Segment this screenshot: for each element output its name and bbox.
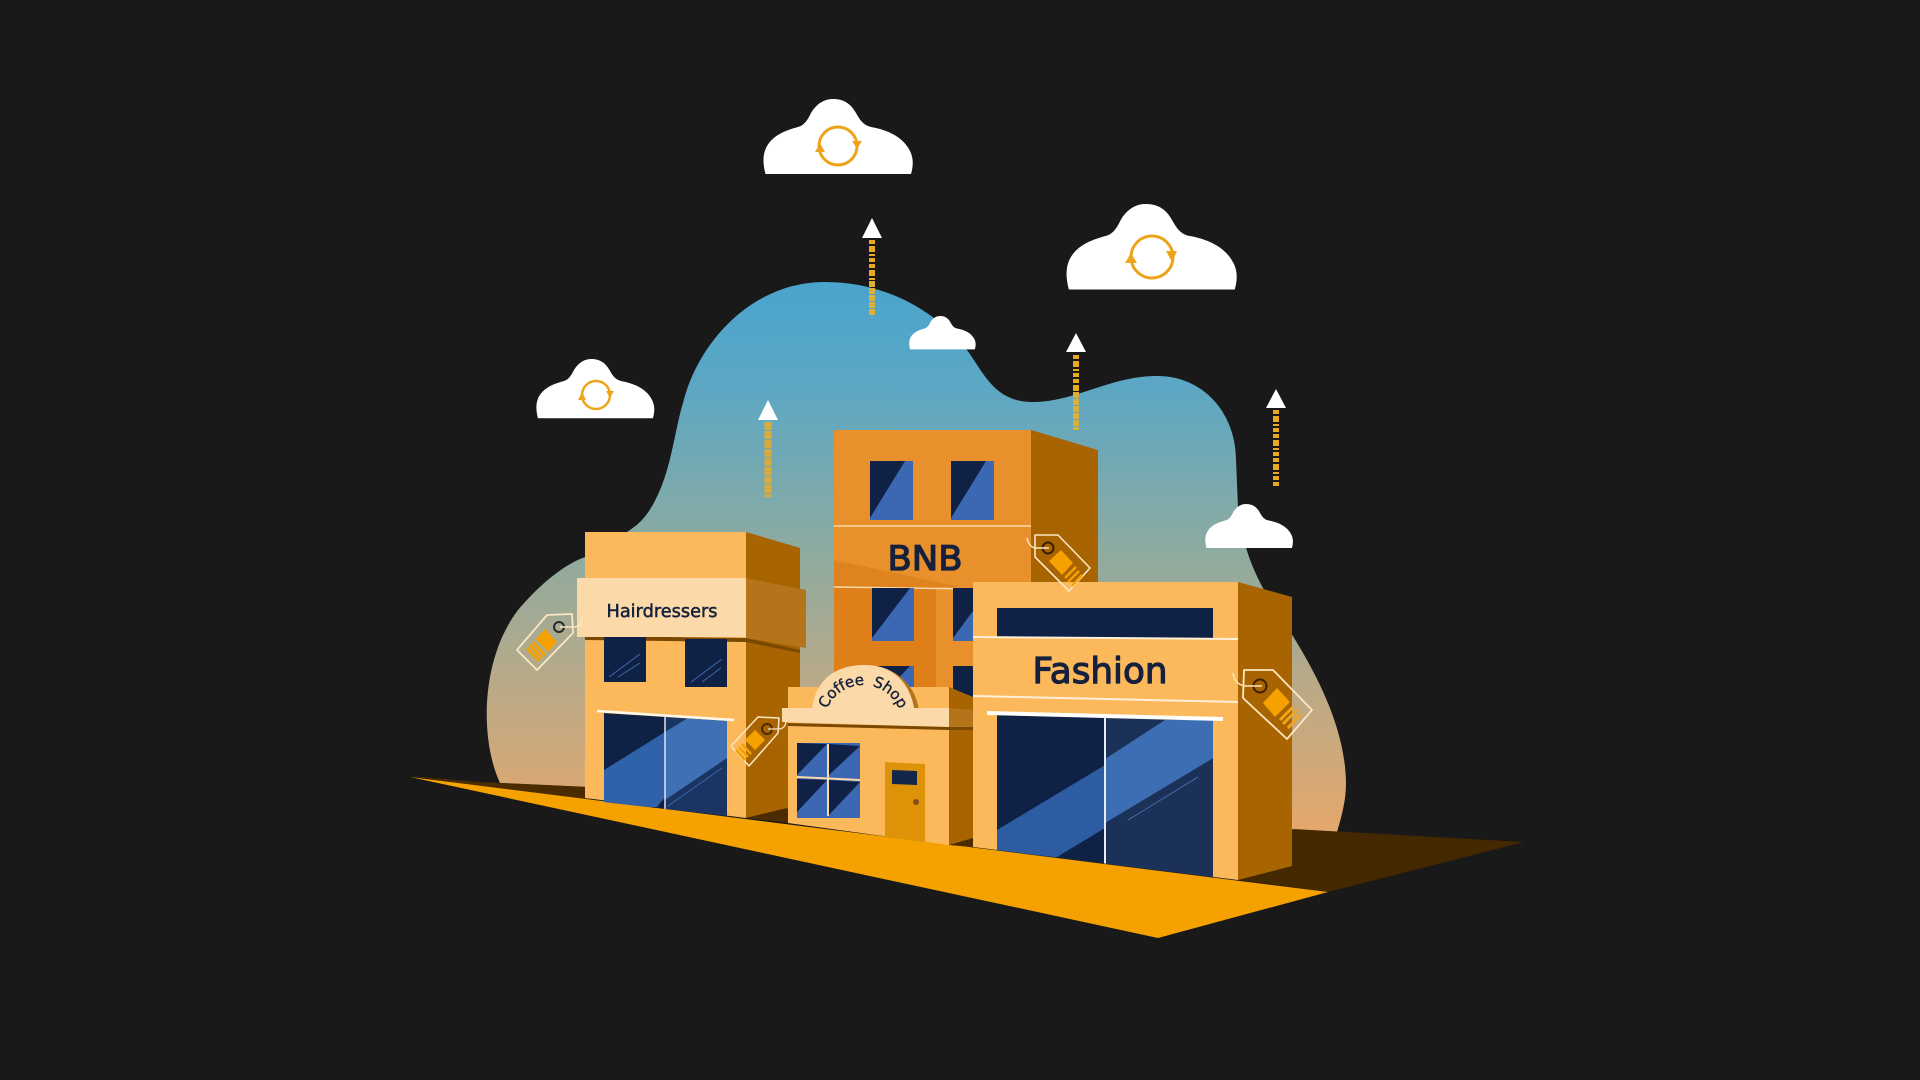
price tag: BNB [1027,535,1090,591]
price tag: Fashion [1233,670,1312,739]
Hairdressers front wall [585,532,746,818]
BNB side wall [1031,430,1098,600]
Hairdressers ground shadow [746,808,788,823]
Hairdressers upper windows [604,637,727,687]
price tag: Hairdressers [517,614,582,670]
Fashion awning [987,713,1223,719]
arrow: up 3 [758,400,778,497]
building: Coffee Shop [782,665,973,847]
arrow: up 1 [862,218,882,316]
cloud: left with refresh icon [536,359,654,418]
Coffee Shop front wall [788,687,949,845]
arrow: up 4 [1266,389,1286,487]
BNB windows [870,461,995,706]
BNB front wall [834,430,1031,700]
Fashion shop window [997,712,1215,882]
Fashion front wall [973,582,1238,880]
Fashion side wall [1238,582,1292,880]
Hairdressers shop window [604,710,730,820]
sky blob [487,282,1346,832]
cloud: top centre with refresh icon [763,99,913,174]
Coffee Shop awning [782,708,973,730]
ground shadow right [1238,829,1524,892]
price tag: Coffee Shop [731,717,786,766]
Coffee Shop side wall [949,687,973,847]
Hairdressers side wall [746,532,800,818]
Fashion banner [997,608,1213,638]
building: BNB [834,430,1098,706]
building: Fashion [973,582,1292,882]
Hairdressers sign: Hairdressers [606,601,718,622]
ground shadow left [410,776,590,802]
BNB sign text: BNB [888,539,962,579]
building: Hairdressers [577,532,806,823]
arrow: up 2 [1066,333,1086,430]
ground street [410,777,1328,938]
Coffee Shop window [797,743,860,818]
cloud: small over blob [909,316,976,349]
cloud: small right [1205,504,1293,548]
cloud: top right with refresh icon [1067,204,1237,290]
Hairdressers awning line [597,711,734,720]
Fashion sign text: Fashion [1032,651,1168,692]
Coffee Shop door [885,762,925,842]
Coffee Shop arch sign: Coffee Shop [819,676,906,708]
Hairdressers sign [577,578,806,653]
